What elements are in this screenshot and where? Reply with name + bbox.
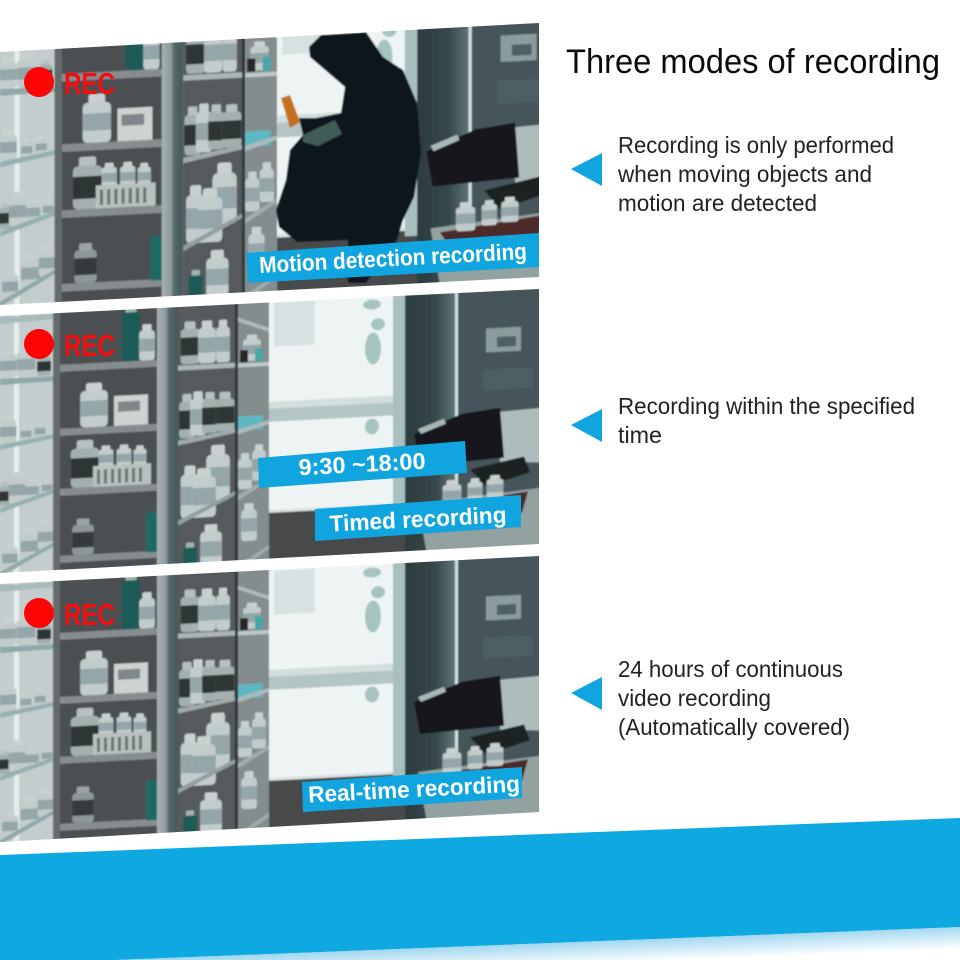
- photo: pharmacy with intruder: [0, 23, 539, 305]
- label: time range: [258, 441, 467, 488]
- icon: arrow for motion detection: [571, 153, 602, 186]
- text: motion detection description: Recording is only performed: [618, 132, 894, 158]
- icon: arrow for real-time recording: [571, 677, 602, 710]
- panel: timed recording: [0, 289, 539, 573]
- title: Three modes of recording: [566, 43, 940, 81]
- text: real-time recording description: (Automatically covered): [618, 714, 850, 740]
- REC indicator: [24, 328, 115, 363]
- text: timed recording description: Recording within the specified: [618, 393, 915, 419]
- text: real-time recording description: 24 hours of continuous: [618, 656, 843, 682]
- label: timed recording: Timed recording: [329, 501, 507, 537]
- REC indicator: REC: [64, 66, 115, 101]
- text: timed recording description: [618, 393, 915, 448]
- photo: empty pharmacy: [0, 556, 539, 842]
- text: real-time recording description: [618, 656, 850, 740]
- label: time range: 9:30 ~18:00: [298, 448, 426, 480]
- REC indicator: [24, 66, 115, 101]
- REC indicator: [24, 597, 115, 632]
- panel: motion detection recording: [0, 23, 539, 305]
- REC indicator: REC: [64, 328, 115, 363]
- label: real-time recording: Real-time recording: [307, 770, 521, 808]
- label: motion detection recording: Motion detection recording: [259, 238, 527, 278]
- icon: arrow for timed recording: [571, 409, 602, 442]
- panel: real-time recording: [0, 556, 539, 842]
- text: motion detection description: when moving objects and: [617, 161, 872, 187]
- footer band: [0, 818, 960, 960]
- REC indicator: REC: [64, 597, 115, 632]
- photo: empty pharmacy: [0, 289, 539, 573]
- text: timed recording description: time: [618, 422, 662, 448]
- label: timed recording: [315, 495, 521, 541]
- text: motion detection description: motion are detected: [618, 190, 817, 216]
- text: real-time recording description: video recording: [618, 685, 771, 711]
- text: motion detection description: [617, 132, 894, 216]
